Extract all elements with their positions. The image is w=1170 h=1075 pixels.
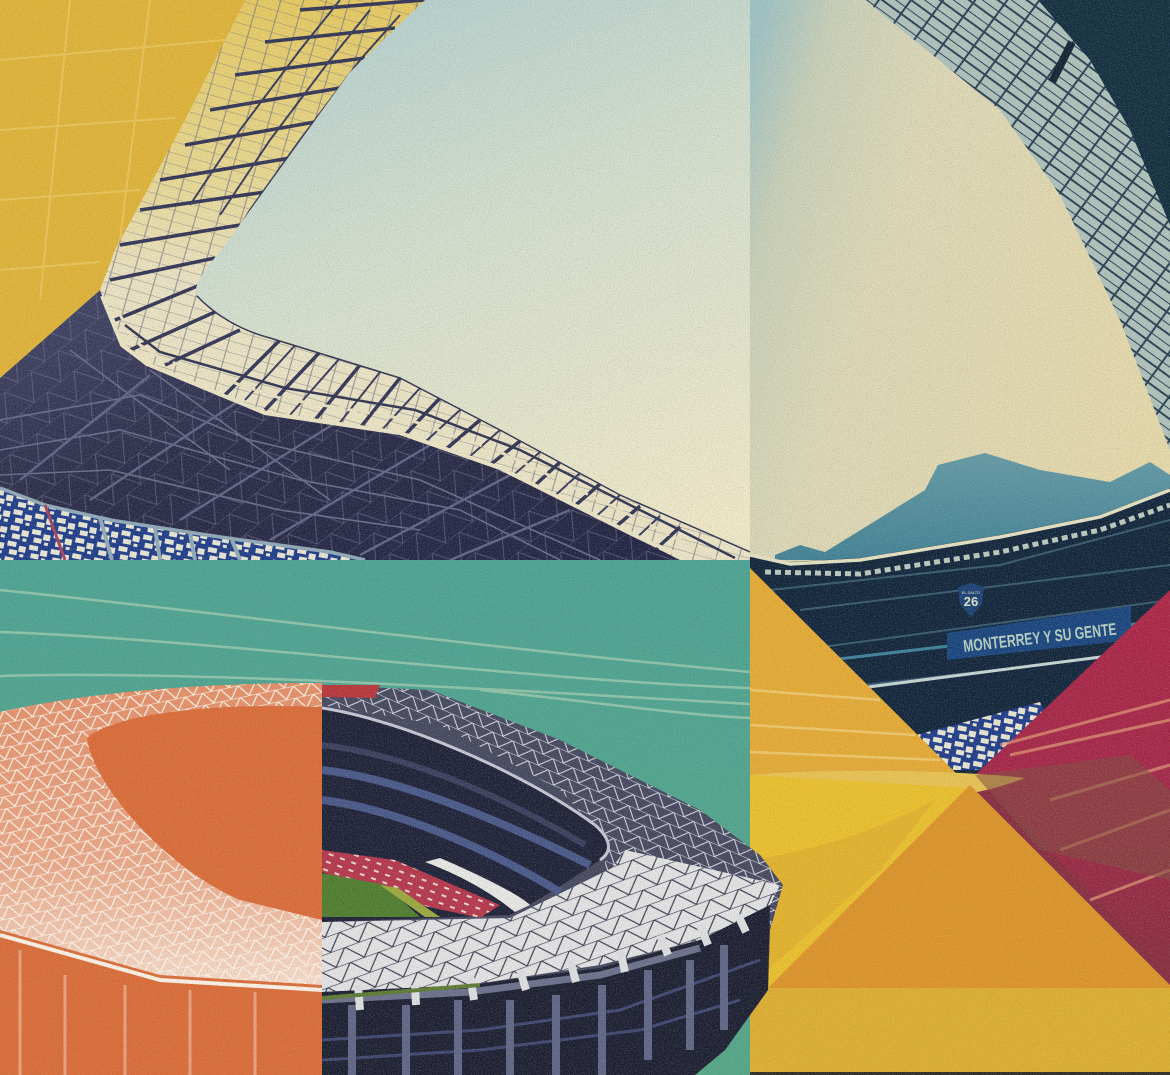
panel: Azteca stadium, orange half (0, 683, 322, 1075)
crimson triangle (975, 590, 1170, 975)
lower orange triangle (768, 785, 1170, 988)
panel: teal field background (0, 560, 750, 1075)
lens shape (750, 771, 1025, 800)
shield: seat 26 (958, 583, 984, 617)
ring truss (750, 490, 1170, 564)
white truss ring (102, 296, 690, 560)
panel: Azteca stadium, photo half (322, 685, 783, 1075)
yellow overlay (0, 0, 245, 378)
banner: Monterrey y su gente (947, 606, 1131, 660)
shield: seat 26: EL SALTO (962, 590, 980, 595)
upper orange triangle (750, 568, 965, 782)
football pitch (322, 873, 420, 917)
outer silhouette (322, 685, 783, 1075)
mountain (775, 453, 1170, 560)
roof brackets (358, 915, 746, 1010)
panel: top-left stadium roof photo (0, 0, 750, 570)
dark roof corner (1038, 0, 1170, 225)
panel: lower-right stands (750, 488, 1170, 774)
roof lattice (865, 0, 1170, 450)
yellow bottom band (750, 988, 1170, 1072)
dark steel underside (0, 280, 700, 570)
columns (352, 945, 724, 1075)
sky (750, 0, 1170, 600)
left yellow wedge (750, 775, 970, 988)
red back stand (322, 685, 380, 698)
white roof front (322, 850, 780, 992)
blue seats (917, 702, 1044, 770)
panel: top-right stadium with mountain photo (750, 0, 1170, 600)
inner bowl (322, 708, 608, 922)
seating bowl (0, 488, 365, 560)
panel: yellow and crimson geometric overlays (750, 568, 1170, 1075)
lower wall (322, 905, 770, 1075)
inner bowl (87, 706, 322, 808)
dark crimson base (750, 775, 1170, 990)
red seats (322, 850, 500, 918)
sky (0, 0, 750, 560)
shield: seat 26: 26 (964, 594, 978, 609)
tiers (322, 770, 590, 892)
roof panels seen from below (0, 0, 750, 560)
